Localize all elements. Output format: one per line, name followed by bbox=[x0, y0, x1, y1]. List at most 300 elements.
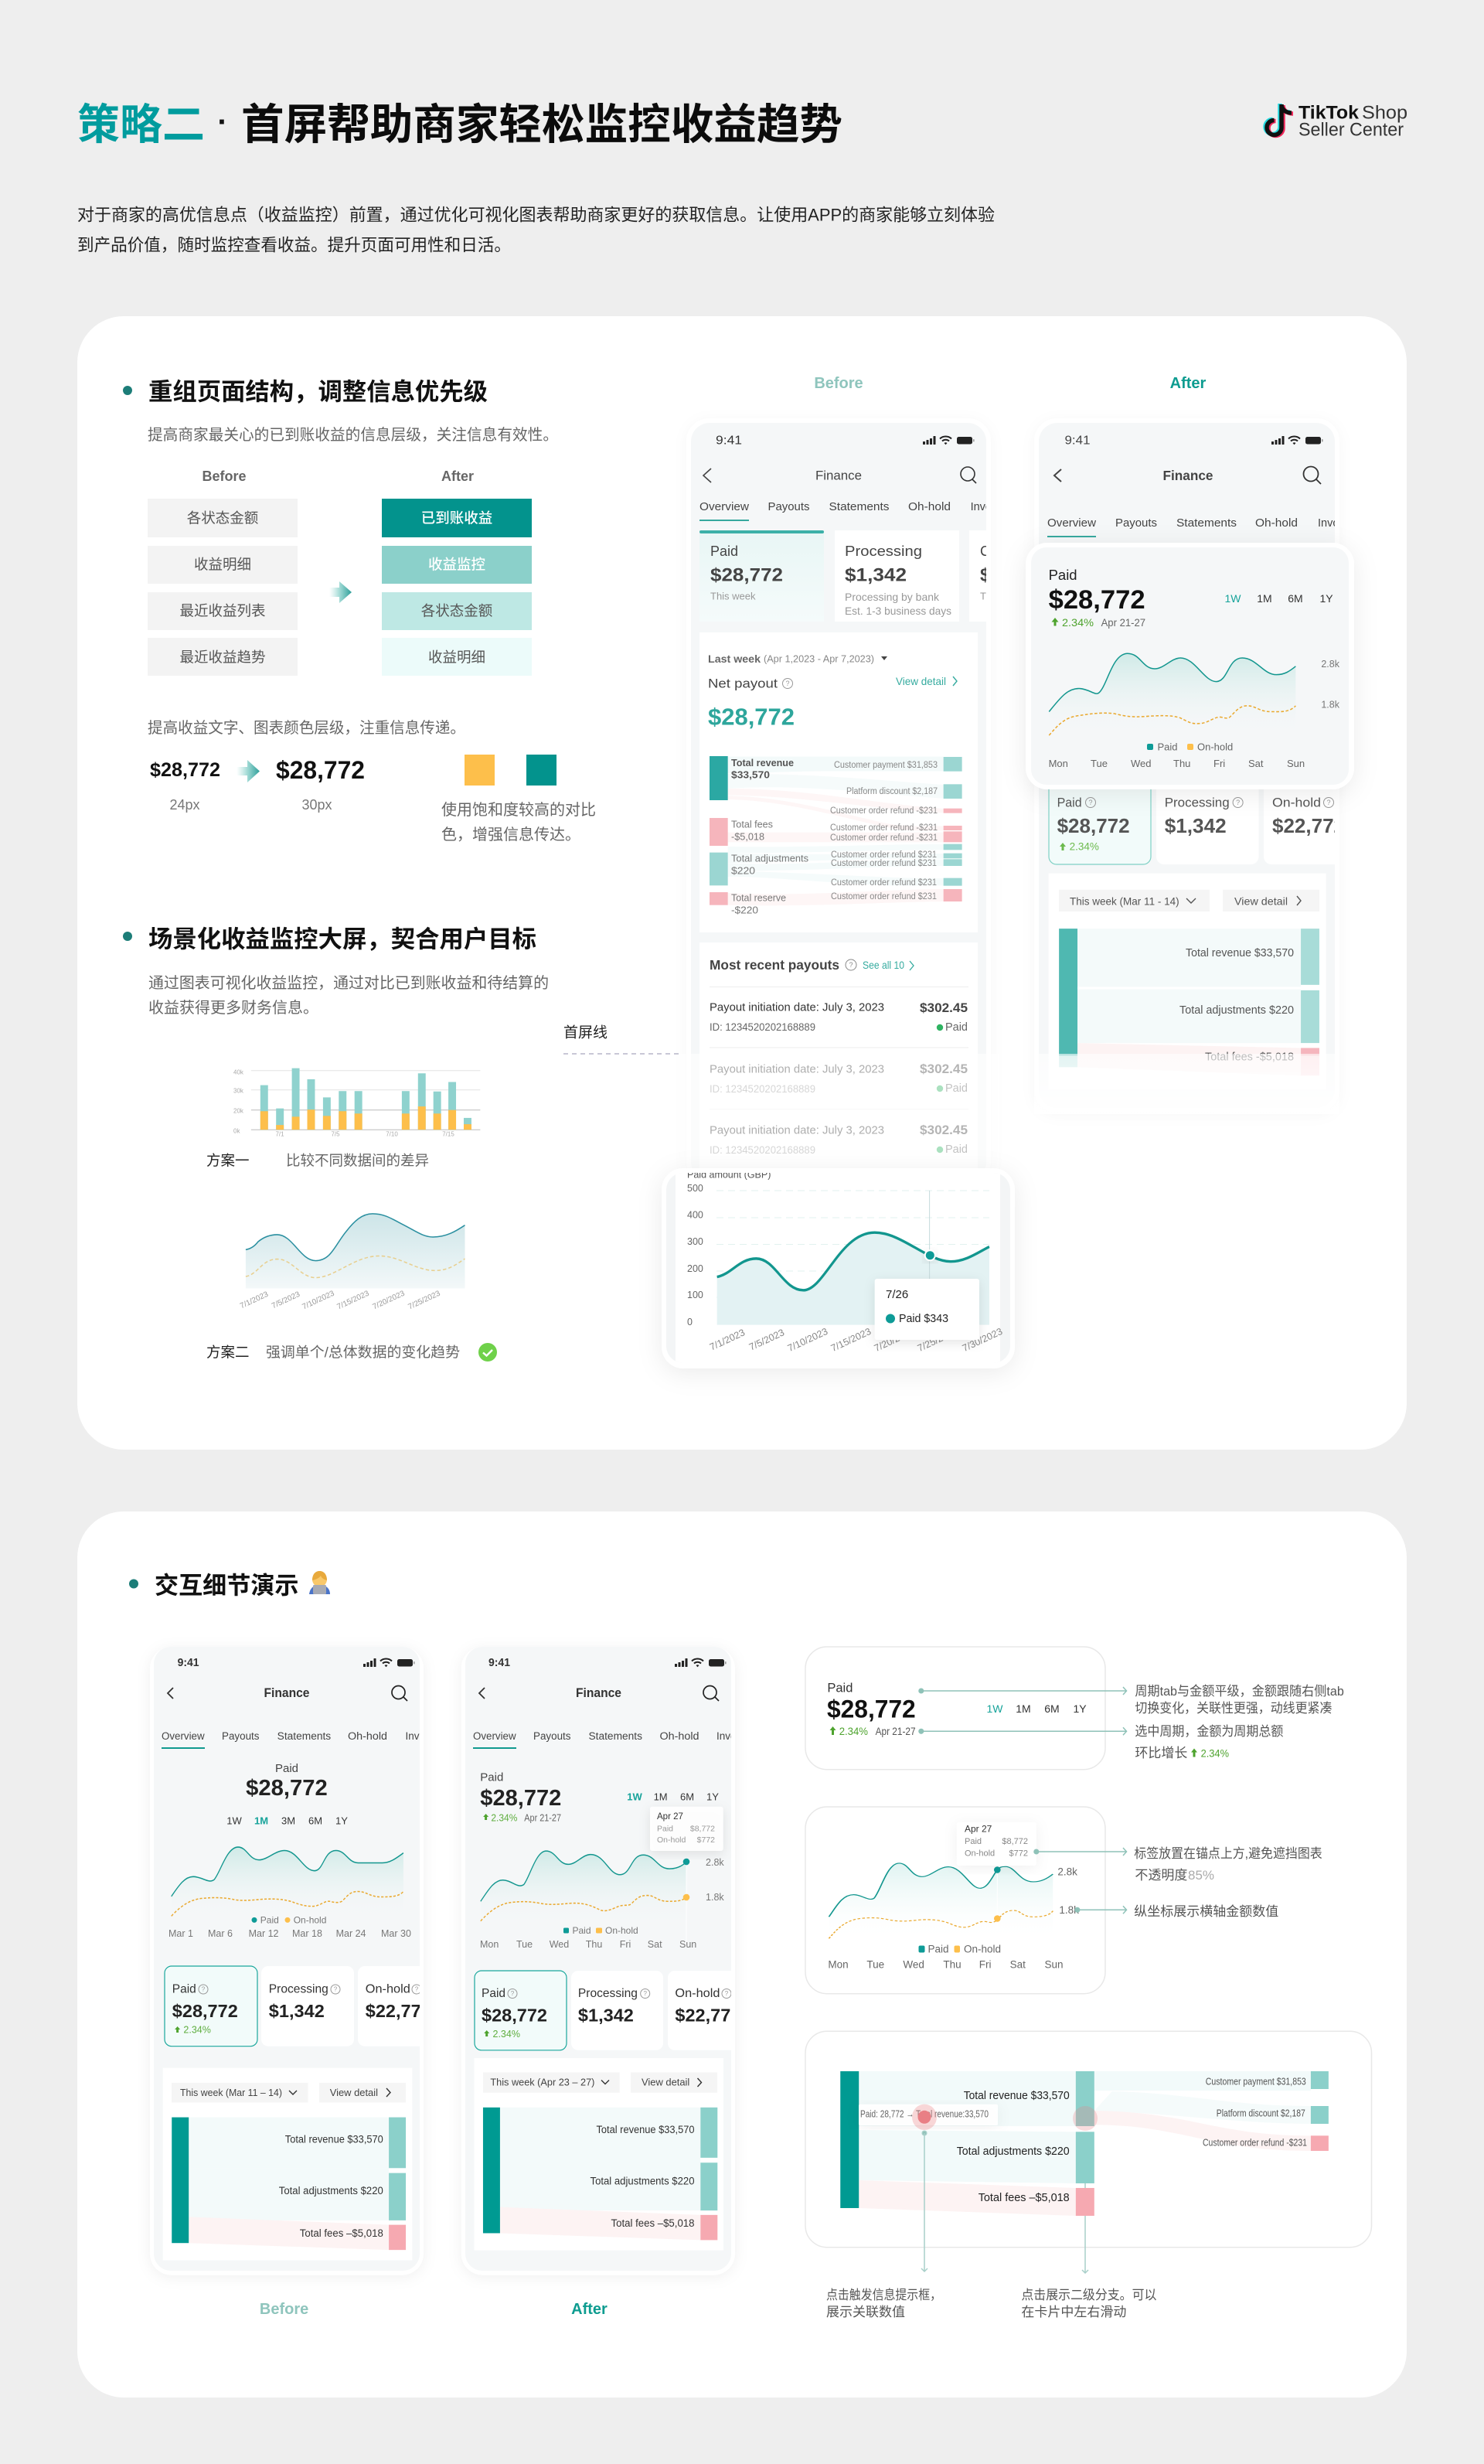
status cards: ? bbox=[643, 1990, 647, 1997]
floating card: bottom trend chart: 500 bbox=[687, 1183, 703, 1194]
line chart: month view: On-hold bbox=[294, 1914, 326, 1925]
sankey: before: Total fees bbox=[731, 818, 773, 830]
sankey chart: Total adjustments $220 bbox=[957, 2145, 1070, 2158]
status cards: ? bbox=[1326, 799, 1331, 806]
line chart: week view with marker: Paid bbox=[572, 1925, 591, 1936]
phone: interaction after: 1Y bbox=[706, 1791, 719, 1803]
caption: option two bbox=[206, 1343, 497, 1362]
line chart: month view: Mar 18 bbox=[292, 1928, 322, 1939]
sankey: before: Customer order refund -$231 bbox=[830, 823, 938, 833]
bar chart: option one: 30k bbox=[233, 1087, 244, 1095]
sankey: before: Customer order refund $231 bbox=[831, 878, 937, 888]
phone: interaction before: $28,772 bbox=[246, 1776, 328, 1801]
type size comparison bbox=[150, 756, 365, 813]
recent payouts card: Payout initiation date: July 3, 2023 bbox=[710, 1000, 884, 1014]
phone: interaction after: Paid bbox=[480, 1770, 503, 1784]
floating card: paid monitor: 1Y bbox=[1319, 592, 1333, 605]
floating card: paid monitor: 1M bbox=[1257, 592, 1272, 605]
sankey: before: Total revenue bbox=[731, 758, 794, 769]
phone: interaction after: 9:41 bbox=[488, 1656, 510, 1669]
detail card: amount and period tabs: 1M bbox=[1016, 1702, 1031, 1715]
detail card: chart with tooltip bbox=[805, 1807, 1105, 1994]
sankey chart: Customer payment $31,853 bbox=[1206, 2076, 1306, 2087]
status cards bbox=[165, 1966, 451, 2047]
phone: interaction before: Finance bbox=[264, 1686, 309, 1700]
net payout card bbox=[699, 632, 978, 932]
line chart: month view: Mar 24 bbox=[336, 1928, 366, 1939]
sankey chart: Platform discount $2,187 bbox=[1217, 2108, 1305, 2118]
sankey chart: Customer order refund -$231 bbox=[1203, 2137, 1307, 2148]
phone: after: Payouts bbox=[1115, 517, 1157, 530]
detail card: chart with tooltip: Sun bbox=[1045, 1959, 1064, 1970]
phone: interaction after bbox=[465, 1647, 731, 2276]
sankey: before: Customer order refund -$231 bbox=[830, 806, 938, 816]
label: before: Before bbox=[260, 2301, 308, 2318]
before priority list bbox=[148, 469, 298, 676]
sankey: Total revenue $33,570 bbox=[285, 2134, 383, 2145]
status cards: $28,772 bbox=[1057, 814, 1130, 837]
area chart: option two: 7/20/2023 bbox=[372, 1289, 407, 1311]
processing card: Processing bbox=[845, 544, 922, 559]
phone: before: $ bbox=[980, 564, 991, 586]
detail card: chart with tooltip: Wed bbox=[903, 1959, 924, 1970]
status cards: $1,342 bbox=[1165, 814, 1227, 837]
title: 首屏帮助商家轻松监控收益趋势 bbox=[241, 90, 842, 152]
recent payouts card: $302.45 bbox=[920, 1001, 968, 1015]
detail card: chart with tooltip: 1.8k bbox=[1059, 1904, 1079, 1916]
arrow bbox=[329, 581, 352, 603]
phone: after: Invoices bbox=[1318, 517, 1359, 530]
status cards: $28,772 bbox=[482, 2006, 547, 2026]
paid card: This week bbox=[710, 591, 756, 602]
sankey bbox=[483, 2108, 717, 2240]
before priority list: Before bbox=[202, 469, 247, 484]
heading: restructure: 重组页面结构，调整信息优先级 bbox=[148, 373, 488, 407]
icon: technologist emoji bbox=[309, 1571, 330, 1594]
floating card: paid monitor: Apr 21-27 bbox=[1101, 616, 1145, 629]
after priority list: 各状态金额 bbox=[421, 603, 492, 619]
breakdown card: This week (Mar 11 – 14) bbox=[180, 2087, 282, 2098]
phone: interaction before: Paid bbox=[275, 1762, 298, 1775]
callout text: amount card: 选中周期，金额为周期总额 bbox=[1135, 1724, 1283, 1739]
bar chart: option one: 7/5 bbox=[331, 1130, 340, 1138]
line chart: paid vs on-hold: Tue bbox=[1091, 758, 1108, 769]
breakdown card: This week (Apr 23 – 27) bbox=[490, 2077, 594, 2087]
line chart: paid vs on-hold: Thu bbox=[1173, 758, 1190, 769]
phone: interaction after: Apr 21-27 bbox=[524, 1811, 561, 1823]
breakdown card bbox=[163, 2068, 412, 2261]
type size comparison: $28,772 bbox=[276, 756, 365, 784]
processing card: $1,342 bbox=[845, 564, 907, 586]
panel: strategy overview bbox=[77, 316, 1407, 1450]
callout text: chart card bbox=[1134, 1846, 1322, 1919]
tooltip: Paid $343 bbox=[899, 1312, 948, 1325]
phone: interaction before: Payouts bbox=[222, 1730, 260, 1742]
breakdown card: View detail bbox=[642, 2077, 689, 2087]
breakdown card bbox=[1049, 874, 1326, 1090]
line chart: paid vs on-hold: Wed bbox=[1131, 758, 1152, 769]
type size comparison: 24px bbox=[169, 797, 200, 813]
line chart: month view: Mar 6 bbox=[208, 1928, 233, 1939]
callout text: tooltip: 点击触发信息提示框， bbox=[826, 2288, 941, 2302]
line chart: week view with marker: Sat bbox=[648, 1939, 662, 1950]
detail card: amount and period tabs bbox=[805, 1647, 1105, 1770]
floating card: paid monitor: 6M bbox=[1288, 592, 1303, 605]
status cards: $22,772 bbox=[1272, 814, 1345, 837]
tooltip: $8,772 bbox=[1002, 1837, 1028, 1846]
callout text: tooltip: 展示关联数值 bbox=[826, 2305, 905, 2319]
detail card: chart with tooltip: 2.8k bbox=[1057, 1866, 1077, 1877]
phone: before: 9:41 bbox=[716, 435, 742, 447]
phone: after: Overview bbox=[1047, 517, 1097, 530]
title: · bbox=[217, 105, 228, 139]
phone: before: Statements bbox=[829, 501, 889, 513]
status cards: ? bbox=[1088, 799, 1093, 806]
sankey: Total revenue $33,570 bbox=[597, 2124, 694, 2135]
sankey: before: Customer order refund -$231 bbox=[830, 833, 938, 843]
floating card: bottom trend chart: 7/1/2023 bbox=[708, 1327, 747, 1353]
breakdown card: View detail bbox=[1234, 895, 1288, 907]
caption: option two: 方案二 bbox=[206, 1344, 250, 1361]
callout text: amount card: 切换变化，关联性更强，动线更紧凑 bbox=[1135, 1701, 1332, 1716]
status cards: On-hold bbox=[1272, 795, 1321, 810]
detail card: chart with tooltip: Fri bbox=[979, 1959, 992, 1970]
floating card: bottom trend chart: 7/30/2023 bbox=[961, 1326, 1004, 1354]
phone: before: C bbox=[980, 544, 990, 559]
card background bbox=[77, 1511, 1407, 2398]
label: after: After bbox=[1170, 375, 1207, 392]
phone: before: T bbox=[980, 591, 986, 602]
detail card: amount and period tabs: 6M bbox=[1044, 1702, 1060, 1715]
recent payouts card: ID: 1234520202168889 bbox=[710, 1082, 815, 1095]
status cards: Paid bbox=[172, 1982, 196, 1996]
detail card: amount and period tabs: 1W bbox=[986, 1702, 1003, 1715]
colour swatches: 色，增强信息传达。 bbox=[441, 826, 580, 843]
phone: interaction after: Oh-hold bbox=[660, 1730, 699, 1742]
tooltip: On-hold bbox=[657, 1835, 686, 1845]
text: scenario description: 通过图表可视化收益监控，通过对比已到账收益和待结算的 bbox=[148, 974, 549, 992]
text: hierarchy description: 提高收益文字、图表颜色层级，注重信息传递。 bbox=[148, 719, 465, 737]
recent payouts card: Paid bbox=[945, 1143, 968, 1156]
sankey: before: Total adjustments bbox=[731, 852, 808, 864]
callout arrows: chart card bbox=[1034, 1848, 1127, 1914]
sankey: after: Total fees -$5,018 bbox=[1205, 1051, 1294, 1064]
sankey: Total fees –$5,018 bbox=[611, 2217, 694, 2229]
phone: after: Statements bbox=[1176, 517, 1237, 530]
phone: interaction after: Invoices bbox=[716, 1730, 755, 1742]
panel: interaction details bbox=[77, 1511, 1407, 2398]
sankey: after bbox=[1059, 929, 1319, 1075]
sankey: after: Total revenue $33,570 bbox=[1186, 947, 1294, 959]
phone: interaction before: 3M bbox=[281, 1815, 295, 1826]
line chart: paid vs on-hold: On-hold bbox=[1197, 741, 1233, 753]
sankey: before: -$220 bbox=[731, 905, 758, 915]
sankey: before: Total reserve bbox=[731, 892, 786, 903]
processing card: Est. 1-3 business days bbox=[845, 605, 951, 617]
detail card: amount and period tabs: Apr 21-27 bbox=[876, 1725, 916, 1737]
phone: before: Invoices bbox=[971, 501, 1012, 513]
phone: interaction after: 1M bbox=[654, 1791, 668, 1803]
detail card: chart with tooltip: On-hold bbox=[964, 1944, 1001, 1955]
callout text: branch: 在卡片中左右滑动 bbox=[1021, 2305, 1126, 2319]
paid card: Paid bbox=[710, 544, 738, 559]
after priority list: 收益监控 bbox=[428, 557, 485, 572]
intro text bbox=[77, 206, 995, 255]
phone: interaction before bbox=[154, 1647, 420, 2276]
detail card: sankey interaction bbox=[805, 2031, 1371, 2248]
net payout card: $28,772 bbox=[708, 704, 795, 730]
after priority list: 已到账收益 bbox=[421, 510, 492, 526]
floating card: paid monitor: $28,772 bbox=[1049, 585, 1145, 615]
sankey chart bbox=[840, 2071, 1329, 2216]
line chart: month view: Mar 30 bbox=[381, 1928, 411, 1939]
line chart: month view: Mar 12 bbox=[249, 1928, 279, 1939]
status cards: ? bbox=[1236, 799, 1240, 806]
tooltip bbox=[650, 1807, 723, 1851]
callout text: amount card: 2.34% bbox=[1201, 1747, 1229, 1760]
bar chart: option one: 20k bbox=[233, 1107, 244, 1115]
floating card: bottom trend chart: 0 bbox=[687, 1317, 693, 1327]
after priority list: After bbox=[441, 469, 474, 484]
sankey: Total fees –$5,018 bbox=[300, 2227, 383, 2239]
status cards: Processing bbox=[1165, 795, 1230, 810]
status cards: ? bbox=[725, 1990, 729, 1997]
recent payouts card: ID: 1234520202168889 bbox=[710, 1021, 815, 1033]
card background bbox=[77, 316, 1407, 1450]
sankey: before: $220 bbox=[731, 864, 755, 877]
area chart: option two: 7/10/2023 bbox=[301, 1289, 336, 1311]
phone: interaction after: Payouts bbox=[533, 1730, 571, 1742]
sankey: Total adjustments $220 bbox=[591, 2175, 694, 2186]
bar chart: option one: 7/1 bbox=[275, 1130, 284, 1138]
tap indicator: flow bbox=[912, 2104, 937, 2130]
status cards: Processing bbox=[578, 1987, 638, 2000]
callout text: chart card: 纵坐标展示横轴金额数值 bbox=[1134, 1904, 1278, 1919]
floating card: bottom trend chart: 7/25/2023 bbox=[916, 1326, 959, 1354]
callout text: amount card bbox=[1135, 1684, 1344, 1760]
line chart: paid vs on-hold: Sat bbox=[1248, 758, 1264, 769]
area chart: option two bbox=[239, 1214, 465, 1311]
tooltip: Apr 27 bbox=[965, 1824, 992, 1835]
tooltip: $8,772 bbox=[690, 1824, 715, 1833]
sankey: Total adjustments $220 bbox=[279, 2185, 383, 2196]
recent payouts card: Paid bbox=[945, 1082, 968, 1095]
line chart: paid vs on-hold: 1.8k bbox=[1321, 699, 1340, 710]
status cards: On-hold bbox=[675, 1987, 720, 2000]
tooltip: $772 bbox=[697, 1835, 715, 1845]
line chart: week view with marker: Fri bbox=[620, 1939, 631, 1950]
tooltip: Paid bbox=[657, 1824, 673, 1833]
net payout card: ? bbox=[785, 680, 790, 687]
phone: interaction before: 1Y bbox=[335, 1815, 348, 1826]
intro text: 对于商家的高优信息点（收益监控）前置，通过优化可视化图表帮助商家更好的获取信息。让使用APP的商家能够立刻体验 bbox=[77, 206, 995, 224]
floating card: bottom trend chart: 200 bbox=[687, 1263, 703, 1274]
before priority list: 收益明细 bbox=[194, 557, 251, 572]
before priority list: 最近收益趋势 bbox=[179, 649, 266, 665]
status cards: $22,772 bbox=[675, 2006, 740, 2026]
phone: before bbox=[691, 423, 986, 1154]
text: scenario description bbox=[148, 974, 549, 1017]
phone: interaction after: Statements bbox=[589, 1730, 642, 1742]
recent payouts card: Paid bbox=[945, 1021, 968, 1034]
bar chart: option one: 40k bbox=[233, 1068, 244, 1076]
fold line label: 首屏线 bbox=[563, 1024, 608, 1041]
status cards: 2.34% bbox=[183, 2025, 211, 2036]
phone: interaction after: Finance bbox=[576, 1686, 621, 1700]
line chart: paid vs on-hold: Sun bbox=[1287, 758, 1305, 769]
tooltip: On-hold bbox=[965, 1849, 995, 1859]
status cards: On-hold bbox=[366, 1982, 410, 1996]
after priority list: 收益明细 bbox=[428, 649, 485, 665]
area chart: option two: 7/1/2023 bbox=[239, 1290, 270, 1310]
bar chart: option one bbox=[233, 1068, 480, 1138]
logo: TikTok Shop Seller Center bbox=[1265, 102, 1407, 141]
colour swatches: 使用饱和度较高的对比 bbox=[441, 801, 596, 819]
phone: interaction before: Overview bbox=[162, 1730, 205, 1742]
floating card: bottom trend chart: 100 bbox=[687, 1290, 703, 1300]
recent payouts card: Payout initiation date: July 3, 2023 bbox=[710, 1124, 884, 1137]
line chart: paid vs on-hold bbox=[1049, 653, 1340, 769]
recent payouts card bbox=[699, 942, 978, 1154]
paid card: $28,772 bbox=[710, 564, 783, 586]
phone: interaction before: 9:41 bbox=[178, 1656, 199, 1669]
floating card: bottom trend chart: 7/15/2023 bbox=[829, 1326, 873, 1354]
line chart: week view with marker: Thu bbox=[586, 1939, 602, 1950]
status cards: 2.34% bbox=[1070, 841, 1099, 852]
phone: interaction after: $28,772 bbox=[480, 1786, 561, 1811]
phone: interaction after: 6M bbox=[680, 1791, 694, 1803]
tooltip: Paid bbox=[965, 1837, 982, 1846]
phone: before: Finance bbox=[815, 469, 862, 482]
tooltip: Apr 27 bbox=[657, 1812, 683, 1822]
processing card: Processing by bank bbox=[845, 591, 940, 603]
tap indicator: node bbox=[1073, 2106, 1098, 2131]
sankey chart: Total revenue $33,570 bbox=[964, 2089, 1070, 2102]
caption: option one bbox=[206, 1152, 429, 1169]
processing card bbox=[835, 530, 959, 622]
status cards: 2.34% bbox=[493, 2029, 520, 2040]
line chart: week view with marker: Wed bbox=[550, 1939, 569, 1950]
callout text: branch: 点击展示二级分支。可以 bbox=[1021, 2288, 1156, 2302]
net payout card: Net payout bbox=[708, 676, 778, 691]
status cards: ? bbox=[334, 1985, 338, 1993]
recent payouts card: Payout initiation date: July 3, 2023 bbox=[710, 1062, 884, 1076]
tooltip bbox=[957, 1822, 1036, 1866]
status cards: $1,342 bbox=[269, 2001, 325, 2021]
logo: TikTok Shop Seller Center: Shop bbox=[1362, 102, 1407, 124]
sankey: before: Customer order refund $231 bbox=[831, 859, 937, 868]
sankey: before: Customer payment $31,853 bbox=[834, 761, 938, 770]
net payout card: (Apr 1,2023 - Apr 7,2023) bbox=[764, 653, 874, 665]
sankey bbox=[172, 2118, 406, 2250]
floating card: bottom trend chart: 7/5/2023 bbox=[747, 1327, 786, 1353]
status cards: Paid bbox=[1057, 795, 1082, 810]
status cards bbox=[1048, 789, 1335, 865]
status cards: $22,772 bbox=[366, 2001, 431, 2021]
status cards: ? bbox=[511, 1990, 515, 1997]
sankey: before: Platform discount $2,187 bbox=[846, 787, 938, 796]
label: before: Before bbox=[814, 375, 863, 392]
status cards: $1,342 bbox=[578, 2006, 634, 2026]
floating card: bottom trend chart: Paid amount (GBP) bbox=[687, 1170, 771, 1181]
line chart: paid vs on-hold: Fri bbox=[1213, 758, 1225, 769]
logo: TikTok Shop Seller Center: Seller Center bbox=[1298, 119, 1404, 141]
detail card: chart with tooltip: Thu bbox=[943, 1959, 962, 1970]
tooltip: 7/26 bbox=[886, 1288, 908, 1301]
line chart: month view bbox=[168, 1847, 411, 1939]
area chart: option two: 7/5/2023 bbox=[271, 1290, 301, 1310]
callout text: tooltip bbox=[826, 2288, 941, 2319]
detail card: chart with tooltip: Mon bbox=[828, 1959, 849, 1970]
type size comparison: $28,772 bbox=[150, 759, 220, 781]
line chart: week view with marker: Mon bbox=[480, 1939, 499, 1950]
callout arrow: branch bbox=[1082, 2183, 1088, 2273]
tooltip: sankey link bbox=[859, 2104, 998, 2125]
heading: interaction: 交互细节演示 bbox=[155, 1566, 298, 1600]
callout text: chart card: 不透明度 bbox=[1135, 1868, 1187, 1883]
breakdown card: View detail bbox=[330, 2087, 378, 2098]
recent payouts card: See all 10 bbox=[863, 959, 904, 971]
caption: option two: 强调单个/总体数据的变化趋势 bbox=[266, 1344, 460, 1361]
phone: interaction after: 2.34% bbox=[491, 1811, 518, 1823]
phone: interaction before: Invoices bbox=[405, 1730, 444, 1742]
text: restructure description: 提高商家最关心的已到账收益的信息层级，关注信息有效性。 bbox=[148, 426, 558, 444]
phone: before: Payouts bbox=[768, 501, 810, 513]
sankey: after: Total adjustments $220 bbox=[1179, 1004, 1294, 1017]
line chart: month view: Mar 1 bbox=[168, 1928, 193, 1939]
sankey: before bbox=[710, 756, 962, 915]
phone: interaction before: Oh-hold bbox=[348, 1730, 387, 1742]
status cards bbox=[475, 1971, 760, 2050]
floating card: paid monitor: Paid bbox=[1049, 567, 1077, 583]
net payout card: Last week bbox=[708, 653, 761, 665]
line chart: week view with marker: On-hold bbox=[605, 1925, 638, 1936]
recent payouts card: ? bbox=[849, 961, 853, 969]
line chart: paid vs on-hold: Mon bbox=[1049, 758, 1068, 769]
callout arrows: amount card bbox=[919, 1687, 1127, 1735]
sankey: before: Customer order refund $231 bbox=[831, 892, 937, 901]
phone: interaction before: 6M bbox=[308, 1815, 322, 1826]
before priority list: 各状态金额 bbox=[187, 510, 258, 526]
type size comparison: 30px bbox=[301, 797, 332, 813]
net payout card: View detail bbox=[896, 675, 946, 687]
bar chart: option one: 7/10 bbox=[386, 1130, 398, 1138]
title: 策略二 bbox=[77, 90, 205, 152]
bar chart: option one: 0k bbox=[233, 1127, 240, 1135]
status cards: ? bbox=[202, 1985, 206, 1993]
bar chart: option one: 7/15 bbox=[442, 1130, 454, 1138]
phone: interaction before: 1M bbox=[254, 1815, 268, 1826]
callout text: chart card: 标签放置在锚点上方,避免遮挡图表 bbox=[1134, 1846, 1322, 1861]
caption: option one: 比较不同数据间的差异 bbox=[286, 1152, 429, 1169]
line chart: week view with marker: 2.8k bbox=[706, 1857, 724, 1868]
phone: before: Overview bbox=[699, 501, 750, 513]
recent payouts card: ID: 1234520202168889 bbox=[710, 1143, 815, 1156]
callout text: amount card: 周期tab与金额平级，金额跟随右侧tab bbox=[1135, 1684, 1344, 1699]
breakdown card: This week (Mar 11 - 14) bbox=[1070, 895, 1179, 907]
line chart: month view: Paid bbox=[260, 1914, 279, 1925]
sankey chart: Total fees –$5,018 bbox=[979, 2191, 1070, 2204]
floating card: bottom trend chart: 300 bbox=[687, 1236, 703, 1247]
detail card: amount and period tabs: Paid bbox=[827, 1681, 853, 1695]
breakdown card bbox=[475, 2058, 723, 2251]
phone: interaction after: Overview bbox=[473, 1730, 516, 1742]
callout text: chart card: 85% bbox=[1188, 1868, 1214, 1883]
tooltip bbox=[875, 1279, 979, 1340]
caption: option one: 方案一 bbox=[206, 1152, 250, 1169]
line chart: week view with marker: Tue bbox=[516, 1939, 533, 1950]
after priority list bbox=[382, 469, 532, 676]
